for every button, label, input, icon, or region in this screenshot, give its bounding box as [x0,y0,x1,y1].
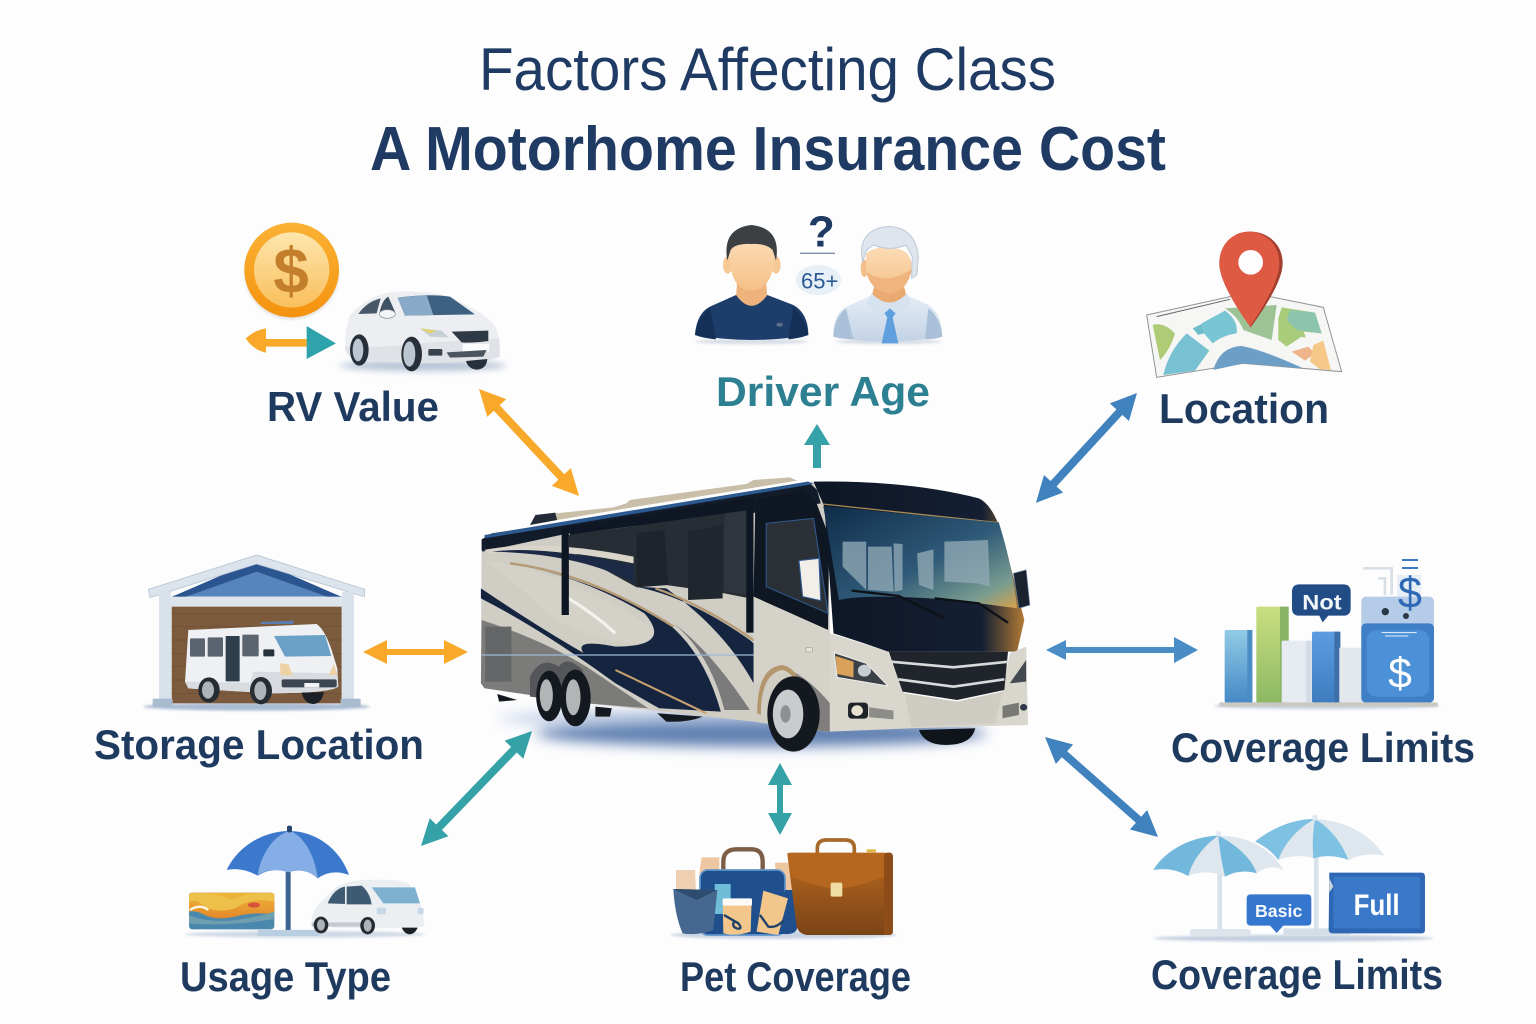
title: A Motorhome Insurance Cost [370,115,1166,184]
label: Location: Location [1159,385,1329,432]
icon: coverage chart with dollar card: $ [1388,649,1412,697]
label: Usage Type: Usage Type [180,953,391,1000]
arrow: location [1026,384,1147,512]
arrow: storage location [363,640,468,664]
icon: pet coverage bags and briefcase [670,840,897,939]
arrow: driver age [804,424,830,468]
icon: umbrellas with basic and full tags [1153,815,1433,942]
icon: driver age people: 65+ [801,269,838,294]
arrow: coverage limits bottom [1036,727,1167,847]
icon: RV value coin, arrow and car [244,223,507,371]
icon: coverage chart with dollar card: $ [1398,569,1422,617]
label: RV Value: RV Value [267,383,439,430]
icon: coverage chart with dollar card: Not [1302,590,1342,614]
arrow: pet coverage [768,763,792,835]
icon: garage with van [143,555,370,711]
label: Coverage Limits (lower): Coverage Limits [1151,951,1443,998]
icon: location map and pin [1147,232,1342,377]
icon: coverage chart with dollar card [1213,560,1440,709]
label: Coverage Limits (upper): Coverage Limits [1171,724,1475,771]
arrow: RV value to motorhome [470,380,589,505]
label: Pet Coverage: Pet Coverage [680,953,911,1000]
arrow: usage type [412,722,541,855]
icon: driver age people: ? [808,208,835,257]
icon: umbrellas with basic and full tags: Basic [1255,901,1303,921]
icon: umbrella with beach card and car [185,826,425,938]
arrow: coverage limits top [1046,637,1198,663]
title: Factors Affecting Class [479,36,1056,103]
title [370,36,1166,184]
icon: driver age people [695,208,942,344]
motorhome illustration [481,477,1030,752]
icon: RV value coin, arrow and car: $ [273,235,309,307]
label: Driver Age: Driver Age [716,368,930,415]
icon: umbrellas with basic and full tags: Full [1354,889,1400,922]
label: Storage Location: Storage Location [94,721,424,768]
